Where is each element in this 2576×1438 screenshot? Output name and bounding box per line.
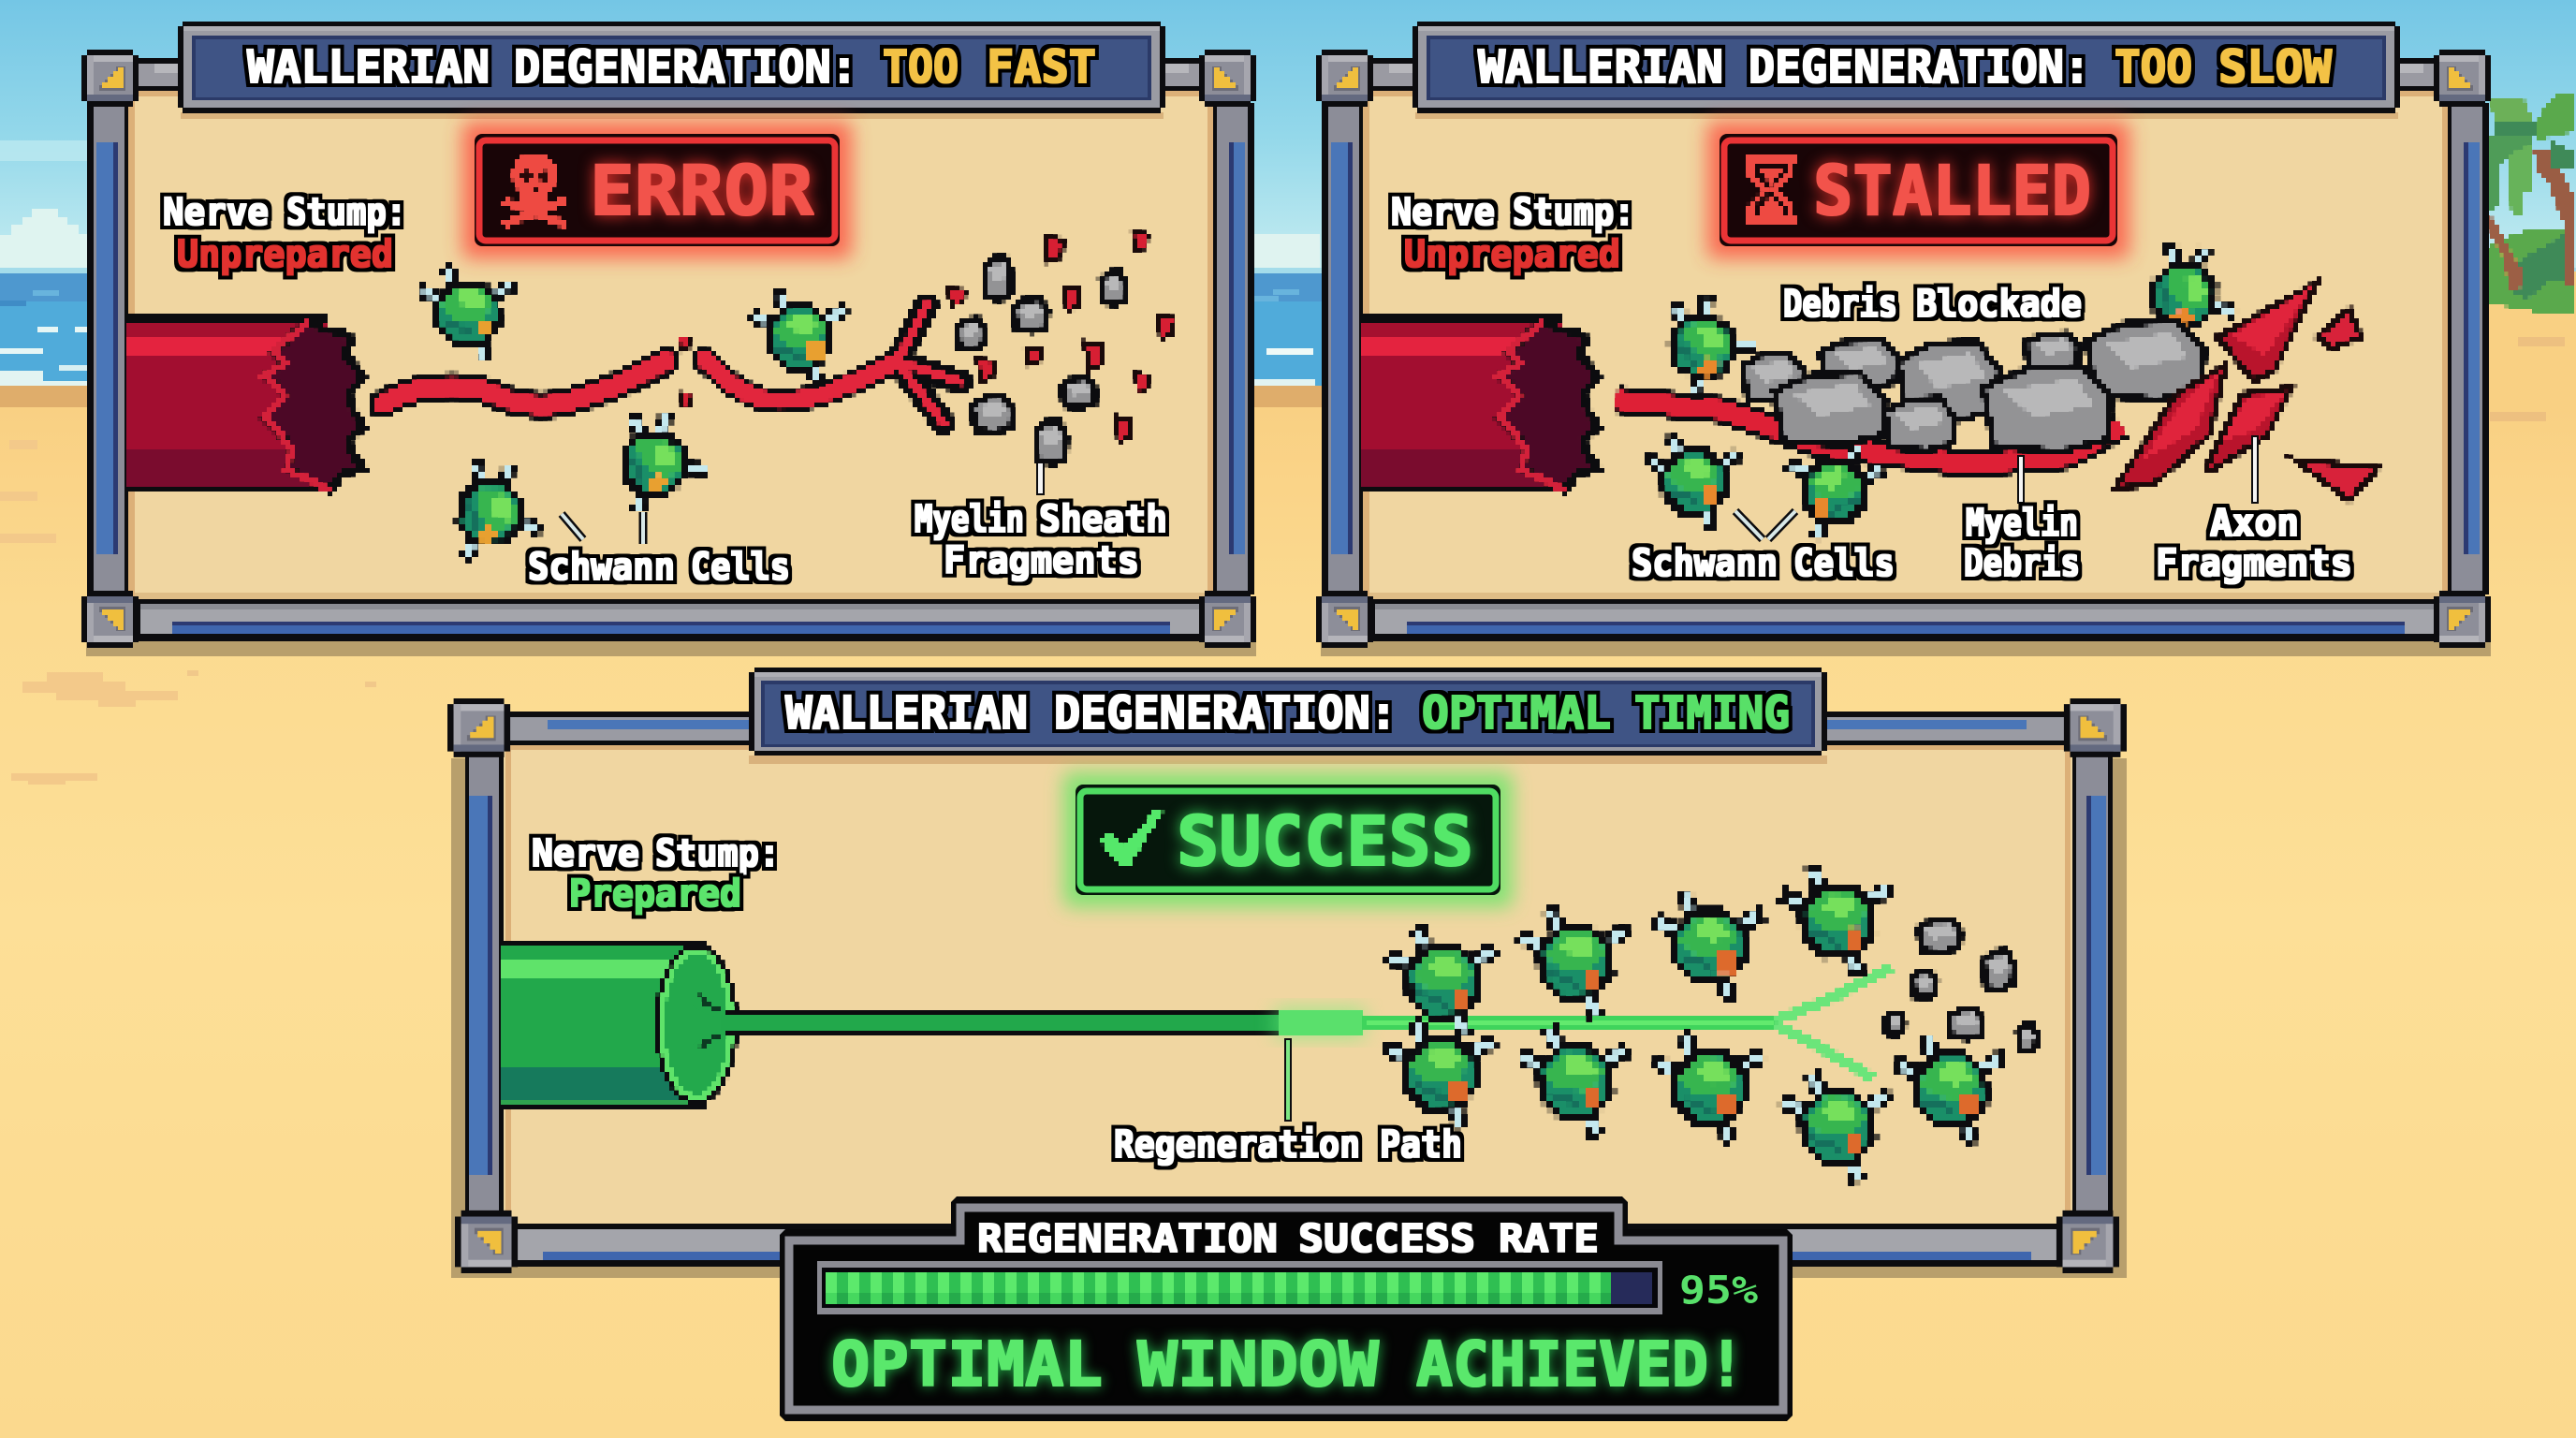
- label: nerve stump prepared: Prepared: [569, 873, 741, 916]
- label: schwann cells: Schwann: [1632, 542, 1778, 585]
- icon: skull and crossbones: [504, 153, 565, 225]
- title: too slow: WALLERIAN: [1478, 41, 1723, 94]
- panel frame: [1316, 22, 2491, 656]
- label: regeneration path: Regeneration: [1114, 1123, 1360, 1167]
- label: nerve stump unprepared: Nerve: [163, 191, 269, 234]
- badge: error: [462, 122, 852, 258]
- badge: success: [1063, 772, 1513, 907]
- myelin sheath fragments: [679, 232, 1175, 463]
- status title: REGENERATION: [977, 1216, 1278, 1261]
- status message: WINDOW: [1137, 1328, 1379, 1401]
- nerve stump: prepared: [502, 940, 739, 1110]
- label: myelin sheath fragments: Myelin: [915, 498, 1024, 541]
- title: too slow: DEGENERATION:: [1749, 41, 2090, 94]
- label: myelin sheath fragments: Sheath: [1039, 498, 1167, 541]
- label: schwann cells: Cells: [691, 546, 790, 589]
- title: optimal timing: [785, 687, 1790, 740]
- label: nerve stump prepared: [532, 832, 780, 916]
- status message: ACHIEVED!: [1416, 1328, 1745, 1401]
- status title: [977, 1216, 1599, 1261]
- label: axon fragments: [2156, 436, 2352, 585]
- label: debris blockade: Blockade: [1916, 283, 2082, 326]
- progress bar: [817, 1261, 1662, 1314]
- badge: success: SUCCESS: [1177, 802, 1473, 882]
- panel: optimal timing: [447, 668, 2127, 1278]
- label: myelin debris: Myelin: [1966, 502, 2078, 545]
- title: too slow: [1478, 41, 2332, 94]
- regeneration axon: [693, 967, 1891, 1078]
- label: axon fragments: Axon: [2210, 502, 2299, 545]
- label: nerve stump unprepared: Unprepared: [177, 233, 393, 276]
- status title: SUCCESS: [1298, 1216, 1475, 1261]
- label: axon fragments: Fragments: [2156, 542, 2352, 585]
- debris fragments: [1885, 919, 2037, 1051]
- title: too fast: WALLERIAN: [247, 41, 490, 94]
- label: schwann cells: [1632, 511, 1895, 585]
- label: schwann cells: Cells: [1793, 542, 1895, 585]
- label: schwann cells: [528, 512, 790, 589]
- label: regeneration path: Path: [1380, 1123, 1462, 1167]
- title: optimal timing: OPTIMAL: [1422, 687, 1611, 740]
- status panel: regeneration success rate: [780, 1196, 1793, 1421]
- label: nerve stump prepared: Nerve: [532, 832, 639, 875]
- label: schwann cells: Schwann: [528, 546, 675, 589]
- title: too slow: TOO: [2115, 41, 2192, 94]
- panel: too slow: [1316, 22, 2491, 656]
- title: too fast: [247, 41, 1096, 94]
- label: myelin sheath fragments: [915, 462, 1167, 582]
- label: regeneration path: [1114, 1039, 1462, 1167]
- debris blockade rocks: [1743, 321, 2204, 451]
- title: too fast: DEGENERATION:: [514, 41, 857, 94]
- palm trees: [2485, 92, 2576, 315]
- panel: too fast: [81, 22, 1256, 656]
- label: nerve stump unprepared: Unprepared: [1404, 233, 1620, 276]
- badge: stalled: STALLED: [1813, 152, 2091, 231]
- label: nerve stump unprepared: Stump:: [286, 191, 406, 234]
- title: optimal timing: DEGENERATION:: [1054, 687, 1397, 740]
- badge: stalled: [1707, 122, 2130, 258]
- label: nerve stump unprepared: [163, 191, 406, 276]
- label: nerve stump unprepared: [1391, 191, 1634, 276]
- icon: hourglass: [1744, 154, 1797, 226]
- status message: OPTIMAL: [831, 1328, 1103, 1401]
- badge: error: ERROR: [590, 152, 813, 231]
- title: optimal timing: WALLERIAN: [785, 687, 1028, 740]
- label: myelin sheath fragments: Fragments: [944, 539, 1139, 582]
- panel frame: [447, 668, 2127, 1278]
- blocked axon: [1617, 400, 2121, 464]
- schwann cells: [1384, 866, 2005, 1181]
- label: nerve stump unprepared: Nerve: [1391, 191, 1495, 234]
- title: too fast: FAST: [987, 41, 1096, 94]
- status message: [831, 1328, 1745, 1401]
- label: nerve stump prepared: Stump:: [655, 832, 780, 875]
- title: too fast: TOO: [883, 41, 959, 94]
- title: too slow: SLOW: [2218, 41, 2332, 94]
- title: optimal timing: TIMING: [1634, 687, 1790, 740]
- axon fragments: [2115, 283, 2378, 501]
- severed axon: [382, 305, 960, 423]
- label: debris blockade: Debris: [1783, 283, 1897, 326]
- nerve stump: [127, 315, 363, 492]
- label: debris blockade: [1783, 283, 2082, 326]
- panel frame: [81, 22, 1256, 656]
- label: myelin debris: Debris: [1964, 542, 2080, 585]
- nerve stump: [1362, 315, 1598, 492]
- schwann cells: [1637, 228, 2250, 539]
- icon: check mark: [1099, 811, 1164, 867]
- status title: RATE: [1499, 1216, 1599, 1261]
- percent value: 95%: [1679, 1268, 1758, 1313]
- label: nerve stump unprepared: Stump:: [1513, 191, 1634, 234]
- label: myelin debris: [1964, 456, 2080, 585]
- schwann cells: [419, 265, 847, 580]
